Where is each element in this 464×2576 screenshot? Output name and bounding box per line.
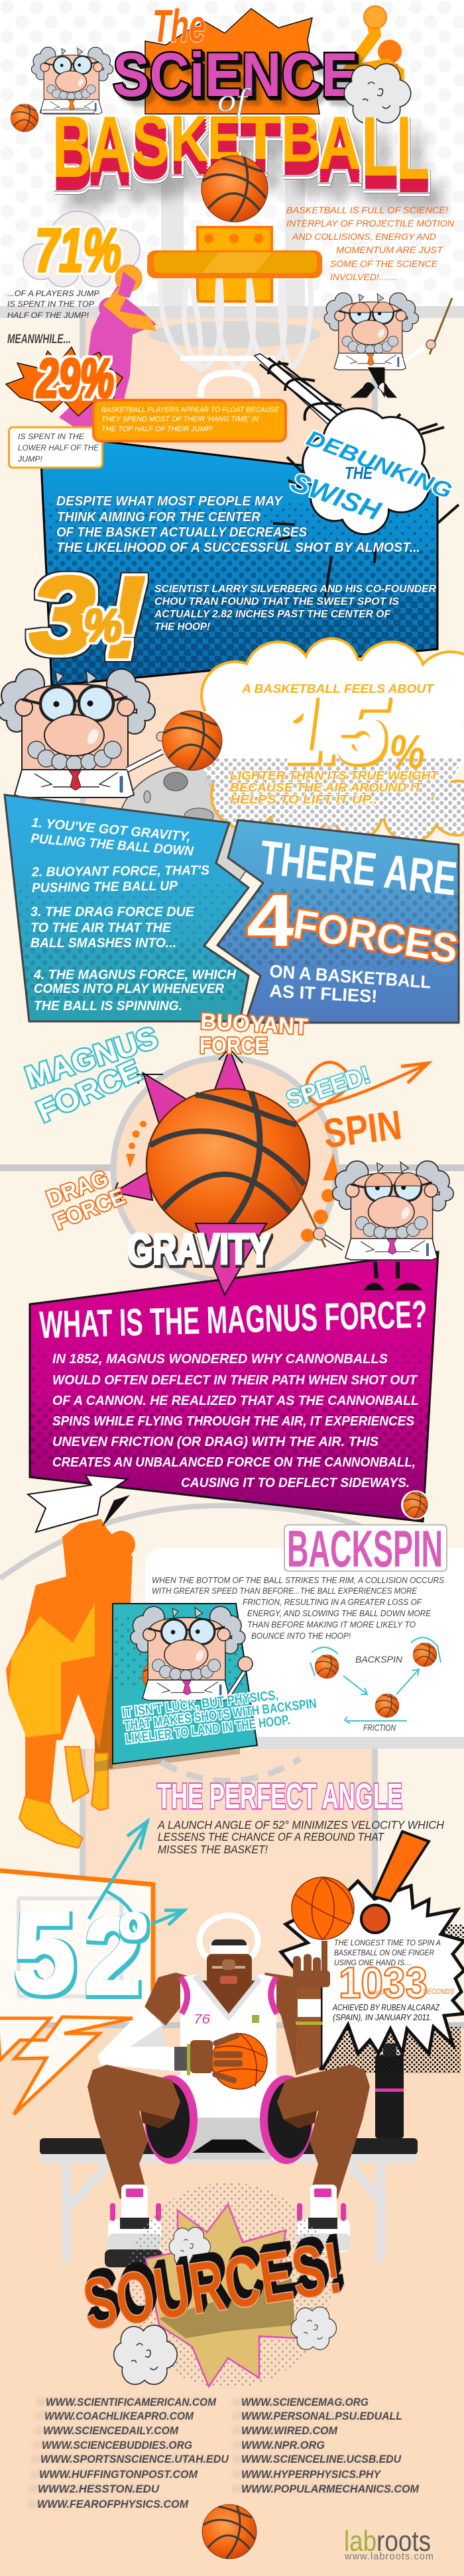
stat: 1.5%: 5 [337, 678, 388, 782]
upper arms [145, 1973, 192, 2026]
text: launch angle: LESSENS THE CHANCE OF A REBOUND THAT [158, 1830, 384, 1843]
stat: 71%: 71% [35, 215, 121, 285]
text: backspin explanation [152, 1576, 445, 1641]
label: magnus force [21, 1019, 162, 1129]
list: sources right: WWW.SCIENCEMAG.ORG [241, 2396, 369, 2408]
icon: bench [40, 2138, 418, 2262]
stat: 3%: 3 [29, 554, 95, 676]
text: magnus explanation: IN 1852, MAGNUS WONDERED WHY CANNONBALLS [52, 1352, 388, 1366]
list: sources left: WWW2.HESSTON.EDU [38, 2483, 160, 2495]
panel: forces list [0, 795, 265, 1021]
label: buoyant force: BUOYANT [200, 1009, 309, 1039]
title: Basketball: L [396, 97, 430, 198]
stat: 52 degrees: 5 [13, 1888, 76, 2018]
logo: labroots: www.labroots.com [344, 2551, 434, 2562]
callout: hang time box: THEY SPEND MOST OF THEIR 'HANG TIME' IN [101, 415, 259, 423]
illustration: player on bench [87, 1916, 370, 2267]
callout: is spent box [9, 427, 102, 468]
callout: intro text: BASKETBALL IS FULL OF SCIENCE! [286, 205, 448, 215]
text: four forces list: TO THE AIR THAT THE [30, 921, 172, 935]
raised hand [293, 1941, 330, 1987]
icon: white tail arrow [28, 1475, 130, 1532]
stat: 3% [29, 553, 146, 682]
list: sources right: WWW.NPR.ORG [241, 2440, 325, 2451]
list: sources right: WWW.SCIENCELINE.UCSB.EDU [241, 2453, 402, 2465]
heading: on a basketball: AS IT FLIES! [269, 981, 378, 1007]
illustration: player on bench: 76 [194, 2012, 211, 2027]
title: Basketball [52, 97, 430, 198]
heading: meanwhile: MEANWHILE... [7, 333, 71, 346]
label: seconds: SECONDS [423, 1988, 455, 1996]
list: sources left: WWW.SCIENCEBUDDIES.ORG [42, 2440, 192, 2451]
text: debunking main: THINK AIMING FOR THE CENTER [57, 510, 261, 525]
text: feels about: HELPS TO LIFT IT UP.. [230, 793, 377, 806]
icon: water bottle [375, 2043, 404, 2138]
panel: 1.5% cloud [196, 637, 464, 843]
icon: halftone behind sources [126, 2183, 331, 2388]
icon: lightning [0, 2017, 133, 2114]
text: silverberg: SCIENTIST LARRY SILVERBERG AND HIS CO-FOUNDER [154, 584, 436, 595]
scientist: title left [11, 48, 113, 132]
label: magnus force: MAGNUS [21, 1019, 162, 1095]
list: sources left: WWW.FEAROFPHYSICS.COM [37, 2499, 189, 2510]
icon: sources burst [146, 2204, 298, 2387]
text: magnus explanation: OF A CANNON. HE REALIZED THAT AS THE CANNONBALL [52, 1394, 419, 1408]
title: Basketball: B [281, 101, 321, 176]
panel: teal [113, 1604, 259, 1764]
text: four forces list: 1. YOU'VE GOT GRAVITY, [31, 815, 192, 845]
list: sources right: WWW.PERSONAL.PSU.EDUALL [241, 2410, 402, 2422]
callout: hang time box [93, 400, 286, 441]
callout: is spent box: JUMP! [17, 454, 43, 464]
stat: 1.5%: . [325, 720, 334, 772]
text: four forces list: PULLING THE BALL DOWN [30, 831, 194, 859]
icon: shadow of teal panel [95, 1742, 240, 1772]
stat: record time: 1033 [339, 1958, 428, 2007]
title: Basketball: A [89, 99, 131, 189]
text: four forces list [30, 815, 237, 1013]
court centre circle [113, 1058, 336, 1280]
text: it isn't luck: LIKELIER TO LAND IN THE HOOP. [125, 1713, 291, 1747]
list: sources left: WWW.SCIENTIFICAMERICAN.COM [46, 2396, 217, 2408]
heading: sources: SOURCES! [78, 2227, 347, 2346]
text: record: USING ONE HAND IS.... [334, 1959, 412, 1967]
text: debunking main: THE LIKELIHOOD OF A SUCCESSFUL SHOT BY ALMOST... [56, 541, 420, 555]
halo [200, 1916, 258, 1966]
thighs [87, 2065, 180, 2199]
heading: debunking the swish: DEBUNKING [303, 425, 455, 503]
icon: halftone under burst [325, 2027, 461, 2073]
callout: starburst record [281, 1831, 464, 2069]
scientist: teal panel [131, 1607, 253, 1700]
callout: hang time box: BASKETBALL PLAYERS APPEAR TO FLOAT BECAUSE [101, 406, 280, 414]
icon: exclamation [361, 1831, 429, 1933]
title: Basketball: K [170, 102, 209, 175]
text: launch angle: A LAUNCH ANGLE OF 52° MINIMIZES VELOCITY WHICH [157, 1818, 444, 1831]
text: four forces list: COMES INTO PLAY WHENEVER [34, 982, 225, 996]
label: gravity: GRAVITY [127, 1224, 270, 1273]
title burst [145, 9, 319, 114]
list: sources right: WWW.HYPERPHYSICS.PHY [241, 2469, 382, 2481]
stat: 1.5%: % [389, 726, 425, 779]
text: magnus explanation: WOULD OFTEN DEFLECT IN THEIR PATH WHEN SHOT OUT [52, 1373, 418, 1388]
callout: hang time box: THE TOP HALF OF THEIR JUMP! [101, 425, 213, 433]
smoke puff: title [345, 64, 410, 123]
sleeve [97, 2007, 178, 2071]
text: debunking main: OF THE BASKET ACTUALLY DECREASES [56, 525, 308, 540]
text: achieved by: (SPAIN), IN JANUARY 2011. [333, 2013, 432, 2022]
stat: 1.5% [287, 678, 425, 782]
callout: intro text: INVOLVED!....... [330, 272, 397, 282]
callout: intro text: AND COLLISIONS, ENERGY AND [292, 232, 436, 242]
list: sources left: WWW.SPORTSNSCIENCE.UTAH.EDU [40, 2453, 229, 2465]
panel: backspin white [145, 1548, 464, 1737]
title: Basketball: E [207, 103, 241, 173]
heading: 4 forces [247, 879, 461, 972]
title: Basketball: T [240, 103, 281, 172]
text: 71% caption [7, 289, 99, 320]
text: backspin explanation: THAN BEFORE MAKING IT MORE LIKELY TO [247, 1620, 416, 1629]
head [207, 1954, 252, 1984]
heading: debunking the swish [287, 425, 455, 527]
heading: on a basketball [269, 961, 432, 1007]
list: sources right: WWW.WIRED.COM [241, 2425, 338, 2437]
heading: on a basketball: ON A BASKETBALL [269, 961, 432, 992]
text: silverberg: THE HOOP! [154, 621, 211, 633]
heading: 4 forces: FORCES [290, 902, 461, 972]
label: drag force: FORCE [50, 1184, 129, 1235]
text: four forces list: PUSHING THE BALL UP [32, 879, 178, 896]
text: magnus explanation: SPINS WHILE FLYING THROUGH THE AIR, IT EXPERIENCES [52, 1414, 415, 1429]
icon: angle arrows [89, 1822, 184, 1925]
list: sources left: WWW.SCIENCEDAILY.COM [43, 2425, 179, 2437]
text: it isn't luck: THAT MAKES SHOTS WITH BACKSPIN [123, 1696, 318, 1733]
stat: 52 degrees: o [119, 1896, 147, 1948]
label: speed arrow: SPEED! [283, 1060, 373, 1113]
text: backspin explanation: WITH GREATER SPEED THAN BEFORE...THE BALL EXPERIENCES MORE [152, 1586, 418, 1596]
text: magnus explanation: CAUSING IT TO DEFLECT SIDEWAYS. [181, 1476, 410, 1490]
stat: 52 degrees: 2 [84, 1895, 141, 2017]
text: record: THE LONGEST TIME TO SPIN A [334, 1939, 441, 1947]
text: four forces list: 3. THE DRAG FORCE DUE [30, 905, 195, 919]
icon: big basketball [146, 1089, 310, 1239]
hand on ball [211, 2034, 267, 2089]
callout: intro text: MOMENTUM ARE JUST [336, 245, 444, 255]
icon: burst 29% [6, 347, 123, 416]
icon: top right jumping player [340, 6, 404, 106]
icon: debunking cloud [287, 407, 455, 535]
smoke puff: upper [170, 2228, 210, 2266]
text: debunking main [56, 494, 420, 555]
text: four forces list: 2. BUOYANT FORCE, THAT'S [31, 863, 210, 880]
list: sources right: WWW.POPULARMECHANICS.COM [241, 2483, 420, 2495]
smoke puff: lower right [292, 2307, 336, 2349]
icon: grey strip below white panel [252, 1737, 464, 1749]
label: buoyant force [200, 1009, 309, 1058]
icon: spin dotted arrow [301, 1153, 339, 1242]
label: minutes: MINUTES [367, 1990, 393, 1997]
icon: corner ball [401, 1490, 430, 1520]
text: backspin explanation: BOUNCE INTO THE HOOP! [251, 1631, 351, 1641]
scientist: with pointer [292, 1161, 453, 1290]
text: achieved by [332, 2003, 439, 2022]
title: Basketball: S [132, 101, 170, 181]
title: Science: SCiENCE [113, 40, 358, 109]
panel: blue debunking [40, 434, 437, 686]
text: magnus explanation [52, 1352, 419, 1490]
heading: debunking the swish: SWISH [287, 467, 385, 527]
text: feels about [230, 682, 439, 806]
label: buoyant force: FORCE [200, 1033, 268, 1058]
text: four forces list: BALL SMASHES INTO... [30, 936, 176, 951]
stat: 52 degrees [13, 1888, 147, 2018]
shorts [166, 2075, 292, 2153]
logo: labroots: labroots [344, 2525, 431, 2557]
icon: basketball title [202, 156, 268, 222]
title: The: The [152, 0, 205, 52]
scientist: large with ball [0, 670, 222, 798]
list: sources left [37, 2396, 229, 2510]
list: sources left: WWW.HUFFINGTONPOST.COM [39, 2469, 198, 2481]
stat: 1.5%: 1 [287, 678, 321, 782]
icon: dashed arc [161, 1759, 300, 1781]
label: speed arrow [283, 1060, 428, 1123]
text: record: BASKETBALL ON ONE FINGER [334, 1949, 434, 1957]
stat: 29%: 29% [36, 347, 114, 409]
stat: 3%: % [84, 599, 122, 651]
icon: moon [116, 766, 255, 905]
text: launch angle [157, 1818, 444, 1856]
label: drag force [43, 1166, 129, 1235]
title: Basketball: L [361, 99, 398, 194]
scientist: pointing with stick [325, 293, 452, 397]
label: friction: FRICTION [363, 1722, 396, 1733]
text: feels about: A BASKETBALL FEELS ABOUT [241, 682, 435, 696]
text: 71% caption: HALF OF THE JUMP! [7, 311, 89, 320]
title: Basketball: B [52, 99, 93, 196]
heading: debunking the swish: THE [345, 463, 373, 483]
callout: is spent box: IS SPENT IN THE [18, 432, 85, 441]
wristbands [298, 1999, 321, 2017]
text: silverberg: ACTUALLY 2.82 INCHES PAST THE CENTER OF [154, 609, 391, 620]
text: magnus explanation: CREATES AN UNBALANCED FORCE ON THE CANNONBALL, [52, 1455, 416, 1470]
icon: backboard [0, 1869, 155, 2022]
icon: footer ball [202, 2504, 257, 2559]
title: of: of [217, 81, 251, 119]
chart: backspin diagram [310, 1637, 441, 1733]
callout: intro text: INTERPLAY OF PROJECTILE MOTION [286, 219, 454, 229]
chart: force arrows [114, 1049, 245, 1203]
text: backspin explanation: FRICTION, RESULTING IN A GREATER LOSS OF [243, 1598, 422, 1607]
text: silverberg [154, 584, 436, 633]
icon: speed lines [255, 354, 459, 599]
label: backspin: BACKSPIN [355, 1654, 403, 1665]
text: feels about: BECAUSE THE AIR AROUND IT [230, 781, 423, 794]
callout: is spent box: LOWER HALF OF THE [18, 443, 99, 452]
text: achieved by: ACHIEVED BY RUBEN ALCARAZ [332, 2003, 439, 2012]
list: sources right [241, 2396, 420, 2495]
text: feels about: LIGHTER THAN ITS TRUE WEIGHT [230, 769, 439, 782]
callout: intro text: SOME OF THE SCIENCE [330, 259, 438, 269]
text: it isn't luck [121, 1688, 318, 1747]
jersey [166, 1974, 292, 2159]
arrow: gravity [196, 1223, 266, 1295]
text: backspin explanation: WHEN THE BOTTOM OF THE BALL STRIKES THE RIM, A COLLISION OCCURS [152, 1576, 445, 1585]
label: magnus force: FORCE [32, 1053, 146, 1129]
text: 71% caption: IS SPENT IN THE TOP [7, 299, 94, 309]
icon: spinning ball [292, 1877, 354, 1939]
text: magnus explanation: UNEVEN FRICTION (OR DRAG) WITH THE AIR. THIS [52, 1435, 379, 1449]
text: four forces list: 4. THE MAGNUS FORCE, WHICH [33, 968, 237, 982]
stat: 3%: ! [105, 553, 146, 682]
text: it isn't luck: IT ISN'T LUCK, BUT PHYSICS, [121, 1688, 279, 1720]
panel: what is magnus force [27, 1252, 444, 1523]
label: spin: SPIN [321, 1102, 404, 1157]
list: sources left: WWW.COACHLIKEAPRO.COM [44, 2410, 194, 2422]
title: Basketball: A [318, 101, 361, 185]
text: debunking main: DESPITE WHAT MOST PEOPLE MAY [56, 494, 284, 509]
text: four forces list: THE BALL IS SPINNING. [34, 999, 182, 1013]
heading: 4 forces: 4 [247, 879, 296, 962]
label: drag force: DRAG [43, 1166, 111, 1211]
hoop [147, 177, 322, 397]
icon: pink jumping player [59, 265, 156, 484]
text: 71% caption: ...OF A PLAYERS JUMP [7, 289, 99, 298]
text: silverberg: CHOU TRAN FOUND THAT THE SWEET SPOT IS [154, 596, 399, 607]
text: backspin explanation: ENERGY, AND SLOWING THE BALL DOWN MORE [247, 1609, 432, 1618]
icon: orange dunking player [6, 1519, 135, 1848]
text: record [334, 1939, 441, 1967]
smoke puff: lower left [114, 2326, 176, 2384]
panel: there are 4 forces [212, 820, 464, 1023]
shoes [121, 2185, 148, 2238]
text: launch angle: MISSES THE BASKET! [158, 1843, 268, 1856]
callout: intro text [286, 205, 454, 282]
panel: 71% cloud [23, 211, 140, 287]
icon: drag dotted arrow [126, 1121, 146, 1168]
